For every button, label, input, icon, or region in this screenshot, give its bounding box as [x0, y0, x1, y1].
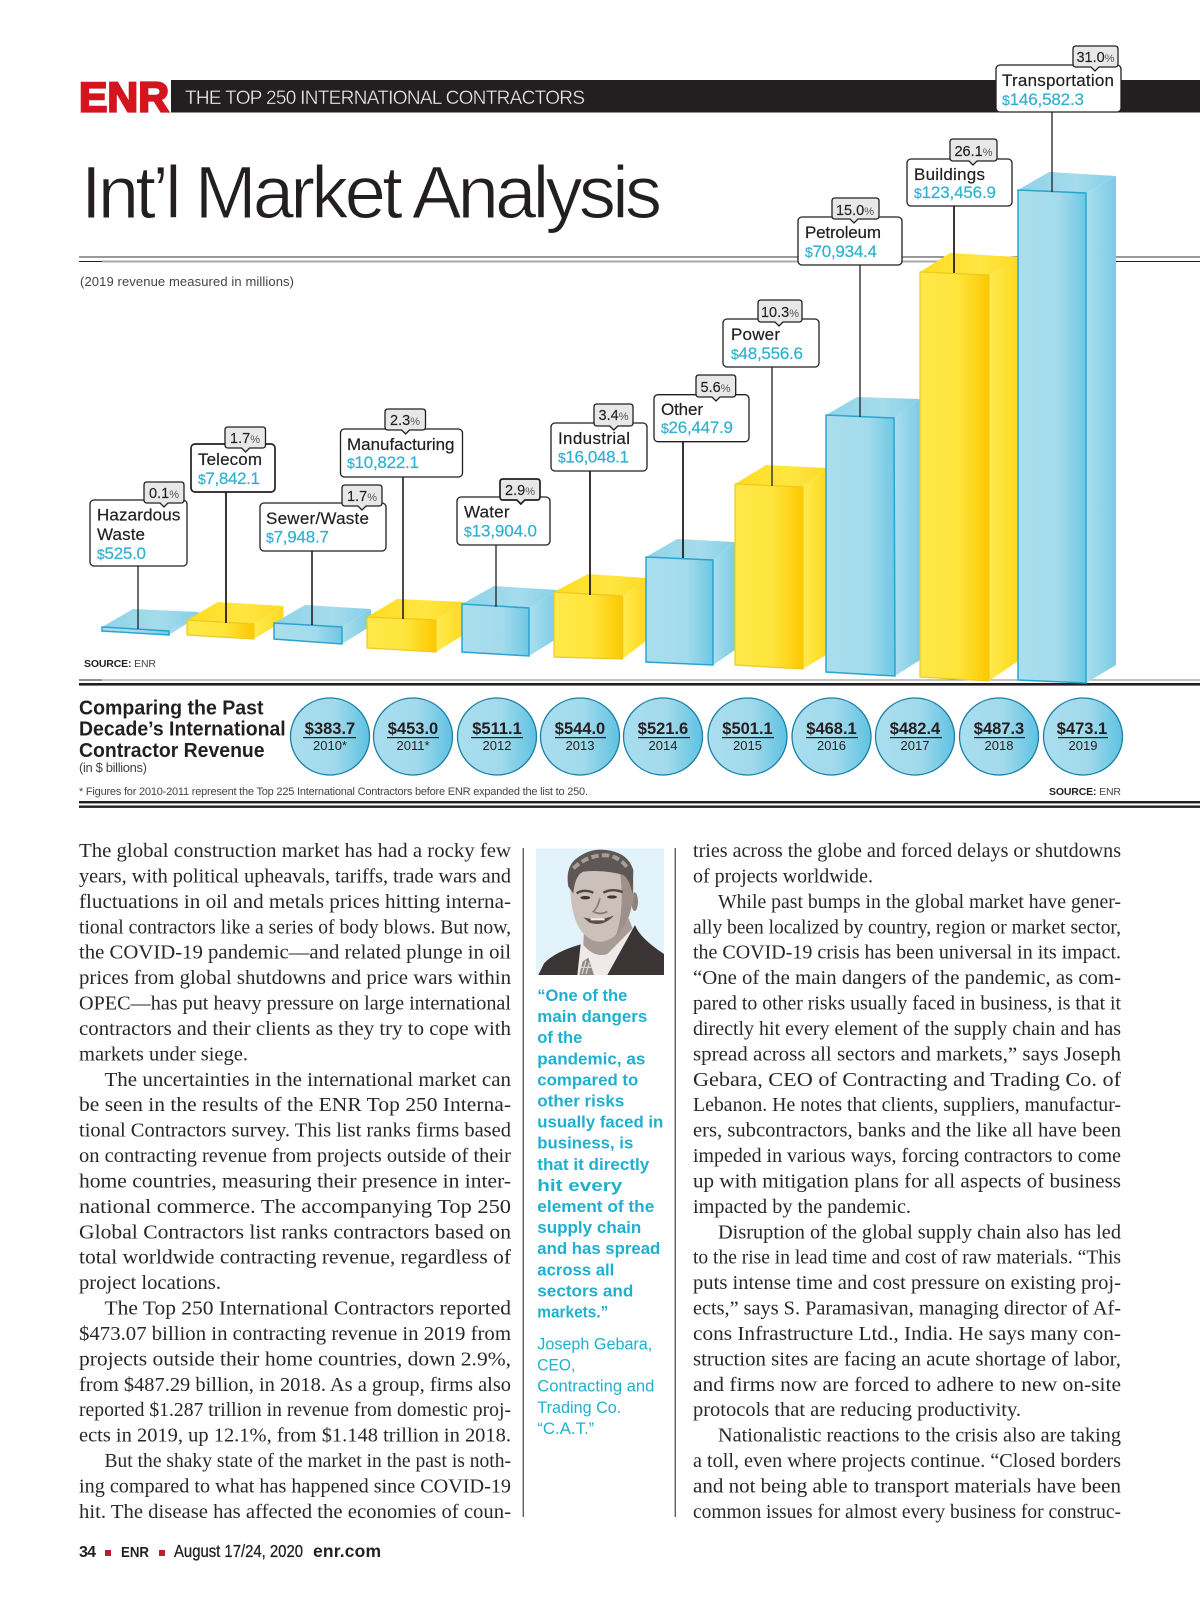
circle: 2016: $468.1 — [806, 720, 857, 738]
circle: 2014: $521.6 — [638, 720, 688, 738]
pull quote: of the — [537, 1029, 582, 1047]
category: Other: 5.6% — [701, 380, 731, 396]
body text: left column: The Top 250 International Contractors reported — [104, 1298, 511, 1320]
shirt — [578, 928, 633, 975]
header band — [79, 74, 1200, 120]
body text: right column: pared to other risks usually faced in business, is that it — [693, 993, 1121, 1015]
body text: left column: ing compared to what has happened since COVID-19 — [79, 1475, 511, 1497]
subtitle: units: (2019 revenue measured in millions) — [80, 274, 294, 289]
pull quote: across all — [537, 1261, 614, 1279]
body text: right column — [693, 840, 1121, 1523]
category: Hazardous Waste: $525.0 — [97, 544, 146, 563]
category: Telecom: $7,842.1 — [198, 469, 260, 488]
title: Int’l Market Analysis — [81, 151, 662, 234]
pull quote: element of the — [537, 1198, 654, 1216]
body text: left column: years, with political upheavals, tariffs, trade wars and — [79, 865, 511, 887]
category: Manufacturing: $10,822.1 — [347, 453, 419, 472]
category: Petroleum: 15.0% — [836, 203, 874, 219]
category: Water: 2.9% — [505, 483, 535, 499]
circle: 2013: 2013 — [566, 738, 594, 753]
body text: right column: a toll, even where projects continue. “Closed borders — [693, 1450, 1121, 1472]
body text: left column: the COVID-19 pandemic—and related plunge in oil — [79, 942, 511, 964]
category: Other: $26,447.9 — [661, 418, 733, 437]
source: revenue: SOURCE: ENR — [1049, 786, 1121, 798]
circle: 2011 — [374, 698, 452, 775]
category: Industrial: $16,048.1 — [558, 448, 629, 467]
footnote: * Figures for 2010-2011 represent the Top 225 International Contractors before ENR expanded the list to 250. — [79, 786, 588, 798]
footer: 34 — [79, 1544, 96, 1561]
photo: Joseph Gebara — [536, 848, 664, 975]
body text: right column: Gebara, CEO of Contracting and Trading Co. of — [693, 1069, 1121, 1091]
body text: left column: projects outside their home countries, down 2.9%, — [79, 1348, 511, 1370]
panel heading: Decade’s International — [79, 719, 286, 741]
circle: 2017: $482.4 — [890, 720, 941, 738]
body text: left column: The global construction market has had a rocky few — [79, 840, 511, 862]
category: Power — [723, 300, 826, 669]
body text: right column: ally been localized by country, region or market sector, — [693, 916, 1121, 938]
pull quote: hit every — [537, 1177, 623, 1195]
category: Buildings — [907, 139, 1018, 681]
tie — [579, 958, 594, 975]
category: Telecom — [187, 427, 284, 639]
body text: left column: tional Contractors survey. This list ranks firms based — [79, 1120, 511, 1142]
body text: right column: struction sites are facing an acute shortage of labor, — [693, 1348, 1121, 1370]
category: Petroleum: $70,934.4 — [805, 242, 877, 261]
circle: 2016: 2016 — [817, 738, 846, 753]
category: Manufacturing: 2.3% — [390, 413, 420, 429]
body text: right column: common issues for almost every business for construc- — [693, 1501, 1121, 1523]
body text: right column: directly hit every element of the supply chain and has — [693, 1018, 1121, 1040]
footer: August 17/24, 2020 — [174, 1541, 303, 1561]
body text: left column: contractors and their clients as they try to cope with — [79, 1018, 511, 1040]
body text: left column: national commerce. The accompanying Top 250 — [79, 1196, 511, 1218]
category: Other — [646, 375, 749, 665]
pull quote: markets.” — [537, 1303, 608, 1321]
nose shadow — [593, 898, 607, 913]
category: Water — [457, 479, 558, 656]
panel: decade revenue — [79, 698, 1122, 798]
hair — [568, 850, 633, 895]
body text: left column: $473.07 billion in contracting revenue in 2019 from — [79, 1323, 511, 1345]
body text: right column: impeded in various ways, forcing contractors to come — [693, 1145, 1121, 1167]
category: Hazardous Waste — [90, 482, 198, 635]
quote attribution: Trading Co. — [537, 1399, 621, 1417]
body text: left column: home countries, measuring their presence in inter- — [79, 1170, 511, 1192]
category: Industrial — [551, 404, 647, 659]
quote attribution: CEO, — [537, 1357, 575, 1375]
logo: ENR: ENR — [79, 74, 169, 120]
body text: left column: from $487.29 billion, in 2018. As a group, firms also — [79, 1374, 511, 1396]
category: Sewer/Waste: $7,948.7 — [266, 528, 329, 547]
panel heading: Comparing the Past — [79, 698, 264, 720]
source: chart: SOURCE: ENR — [84, 658, 156, 670]
circle: 2018 — [960, 698, 1038, 775]
circle: 2010 — [290, 698, 370, 775]
column dividers — [523, 848, 676, 1517]
body text: right column: and not being able to transport materials have been — [693, 1475, 1121, 1497]
category: Hazardous Waste: 0.1% — [149, 486, 179, 502]
pull quote: compared to — [537, 1071, 638, 1089]
category: Petroleum: Petroleum — [805, 223, 881, 242]
body text: left column: on contracting revenue from projects outside of their — [79, 1145, 511, 1167]
category: Industrial: 3.4% — [599, 408, 629, 424]
footer: enr.com — [313, 1541, 381, 1561]
category: Other: Other — [661, 400, 703, 419]
circle: 2014 — [624, 698, 702, 775]
body text: right column: to the rise in lead time and cost of raw materials. “This — [693, 1247, 1121, 1269]
body text: right column: While past bumps in the global market have gener- — [718, 891, 1121, 913]
category: Power: 10.3% — [761, 305, 799, 321]
body text: left column — [79, 840, 511, 1523]
chart: 2019 revenue by market — [90, 46, 1121, 683]
body text: left column: project locations. — [79, 1272, 221, 1294]
footer — [79, 1541, 381, 1561]
body text: left column: But the shaky state of the market in the past is noth- — [104, 1450, 511, 1472]
body text: left column: tional contractors like a series of body blows. But now, — [79, 916, 511, 938]
category: Hazardous Waste: Waste — [97, 525, 145, 544]
body text: right column: up with mitigation plans for all aspects of business — [693, 1170, 1121, 1192]
body text: right column: the COVID-19 crisis has been universal in its impact. — [693, 942, 1121, 964]
header bar title: THE TOP 250 INTERNATIONAL CONTRACTORS — [185, 88, 585, 109]
pull quote: and has spread — [537, 1240, 660, 1258]
quote attribution: Contracting and — [537, 1378, 654, 1396]
body text: right column: of projects worldwide. — [693, 865, 873, 887]
body text: right column: impacted by the pandemic. — [693, 1196, 911, 1218]
body text: left column: total worldwide contracting revenue, regardless of — [79, 1247, 511, 1269]
pull quote: pandemic, as — [537, 1050, 645, 1068]
category: Sewer/Waste — [260, 485, 386, 644]
category: Water: Water — [464, 503, 510, 522]
circle: 2012: $511.1 — [472, 720, 522, 738]
quote attribution — [537, 1336, 654, 1438]
body text: right column: and firms now are forced to adhere to new on-site — [693, 1374, 1121, 1396]
body text: right column: ers, subcontractors, banks and the like all have been — [693, 1120, 1121, 1142]
body text: left column: prices from global shutdowns and price wars within — [79, 967, 511, 989]
body text: right column: Nationalistic reactions to the crisis also are taking — [718, 1425, 1121, 1447]
body text: left column: ects in 2019, up 12.1%, from $1.148 trillion in 2018. — [79, 1425, 511, 1447]
pull quote: supply chain — [537, 1219, 641, 1237]
category: Buildings: Buildings — [914, 165, 985, 184]
body text: right column: ects,” says S. Paramasivan, managing director of Af- — [693, 1298, 1121, 1320]
circle: 2012: 2012 — [483, 738, 511, 753]
pull quote: sectors and — [537, 1282, 633, 1300]
circle: 2015: 2015 — [733, 738, 762, 753]
brows and eyes — [577, 891, 593, 893]
circle: 2018: $487.3 — [974, 720, 1024, 738]
circle: 2016 — [792, 698, 871, 775]
quote attribution: “C.A.T.” — [537, 1420, 594, 1438]
smile — [583, 915, 614, 924]
pull quote: main dangers — [537, 1008, 647, 1026]
circle: 2019: $473.1 — [1057, 720, 1107, 738]
category: Sewer/Waste: 1.7% — [347, 489, 377, 505]
circle: 2019: 2019 — [1069, 738, 1097, 753]
quote attribution: Joseph Gebara, — [537, 1336, 652, 1354]
body text: left column: be seen in the results of the ENR Top 250 Interna- — [79, 1094, 511, 1116]
circle: 2011: 2011* — [396, 738, 430, 753]
body text: right column: protocols that are reducing productivity. — [693, 1399, 1021, 1421]
suit — [538, 944, 581, 975]
body text: left column: fluctuations in oil and metals prices hitting interna- — [79, 891, 511, 913]
ear — [631, 892, 638, 911]
category: Manufacturing: Manufacturing — [347, 435, 454, 454]
panel heading: (in $ billions) — [79, 760, 147, 775]
body text: right column: Lebanon. He notes that clients, suppliers, manufactur- — [693, 1094, 1121, 1116]
footer: ENR — [121, 1544, 149, 1561]
circle: 2018: 2018 — [985, 738, 1013, 753]
pull quote: other risks — [537, 1092, 624, 1110]
pull quote: “One of the — [537, 987, 627, 1005]
body text: left column: The uncertainties in the international market can — [104, 1069, 511, 1091]
pull quote: usually faced in — [537, 1114, 663, 1132]
pull quote: that it directly — [537, 1156, 650, 1174]
body text: left column: reported $1.287 trillion in revenue from domestic proj- — [79, 1399, 511, 1421]
body text: left column: Global Contractors list ranks contractors based on — [79, 1221, 511, 1243]
category: Hazardous Waste: Hazardous — [97, 506, 180, 525]
body text: right column: “One of the main dangers of the pandemic, as com- — [693, 967, 1121, 989]
category: Sewer/Waste: Sewer/Waste — [266, 509, 369, 528]
circle: 2013: $544.0 — [555, 720, 605, 738]
body text: right column: puts intense time and cost pressure on existing proj- — [693, 1272, 1121, 1294]
category: Industrial: Industrial — [558, 429, 630, 448]
category: Transportation: $146,582.3 — [1002, 90, 1084, 109]
face — [570, 863, 634, 942]
body text: right column: cons Infrastructure Ltd., India. He says many con- — [693, 1323, 1121, 1345]
category: Transportation: 31.0% — [1076, 50, 1115, 66]
circle: 2013 — [540, 698, 620, 775]
category: Transportation: Transportation — [1002, 71, 1114, 90]
category: Petroleum — [798, 198, 920, 676]
body text: left column: OPEC—has put heavy pressure on large international — [79, 993, 511, 1015]
category: Manufacturing — [340, 409, 465, 652]
circle: 2015: $501.1 — [722, 720, 773, 738]
category: Buildings: 26.1% — [954, 144, 993, 160]
body text: right column: spread across all sectors and markets,” says Joseph — [693, 1043, 1121, 1065]
category: Water: $13,904.0 — [464, 522, 537, 541]
body text: left column: hit. The disease has affected the economies of coun- — [79, 1501, 511, 1523]
category: Buildings: $123,456.9 — [914, 183, 996, 202]
panel heading — [79, 698, 286, 775]
black header bar — [171, 80, 1200, 112]
circle: 2010: 2010* — [313, 738, 347, 753]
category: Power: $48,556.6 — [731, 344, 803, 363]
body text: right column: tries across the globe and forced delays or shutdowns — [693, 840, 1121, 862]
pull quote — [537, 987, 663, 1322]
circle: 2015 — [708, 698, 787, 775]
circle: 2014: 2014 — [649, 738, 677, 753]
circle: 2011: $453.0 — [388, 720, 438, 738]
category: Power: Power — [731, 325, 780, 344]
category: Telecom: 1.7% — [230, 431, 260, 447]
body text: right column: Disruption of the global supply chain also has led — [718, 1221, 1121, 1243]
circle: 2019 — [1044, 698, 1122, 775]
neck — [583, 918, 633, 955]
circle: 2012 — [458, 698, 536, 775]
category: Transportation — [996, 46, 1121, 683]
pull quote: business, is — [537, 1135, 633, 1153]
circle: 2017 — [876, 698, 954, 775]
rule lines under title — [79, 256, 1200, 808]
circle: 2017: 2017 — [901, 738, 929, 753]
category: Telecom: Telecom — [198, 450, 262, 469]
body text: left column: markets under siege. — [79, 1043, 248, 1065]
panel heading: Contractor Revenue — [79, 740, 265, 762]
circle: 2010: $383.7 — [305, 720, 355, 738]
